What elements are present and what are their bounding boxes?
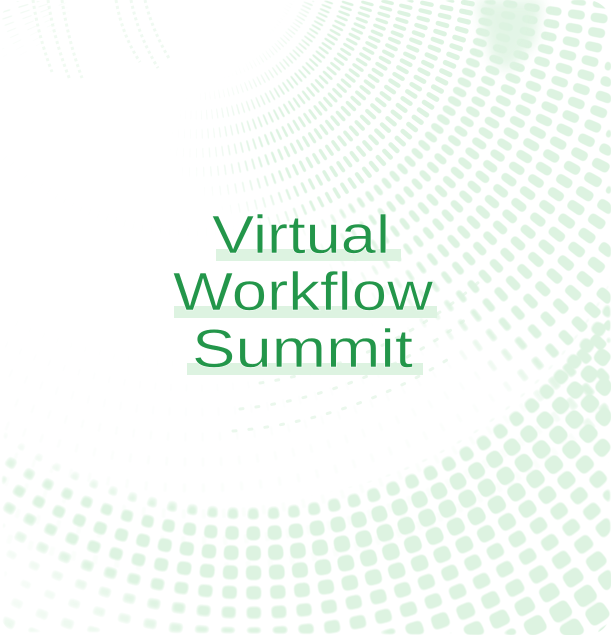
halftone arcs: upper right sweep, inner rings [2,0,475,226]
highlight bar: Virtual [216,249,401,261]
title line: Summit: Summit [192,319,413,379]
dense blob at top right [476,0,542,72]
faint tiny dots under the title [233,281,480,431]
highlight bar: Summit [187,363,423,375]
title line: Workflow: Workflow [173,262,434,322]
title: Virtual Workflow Summit [173,205,437,379]
faint arcs at top left [33,0,170,80]
title line: Virtual: Virtual [212,205,390,265]
halftone arcs: upper right sweep, outer rings [304,0,611,427]
highlight bar: Workflow [174,306,437,318]
halftone arcs: bottom sweep [2,304,611,635]
